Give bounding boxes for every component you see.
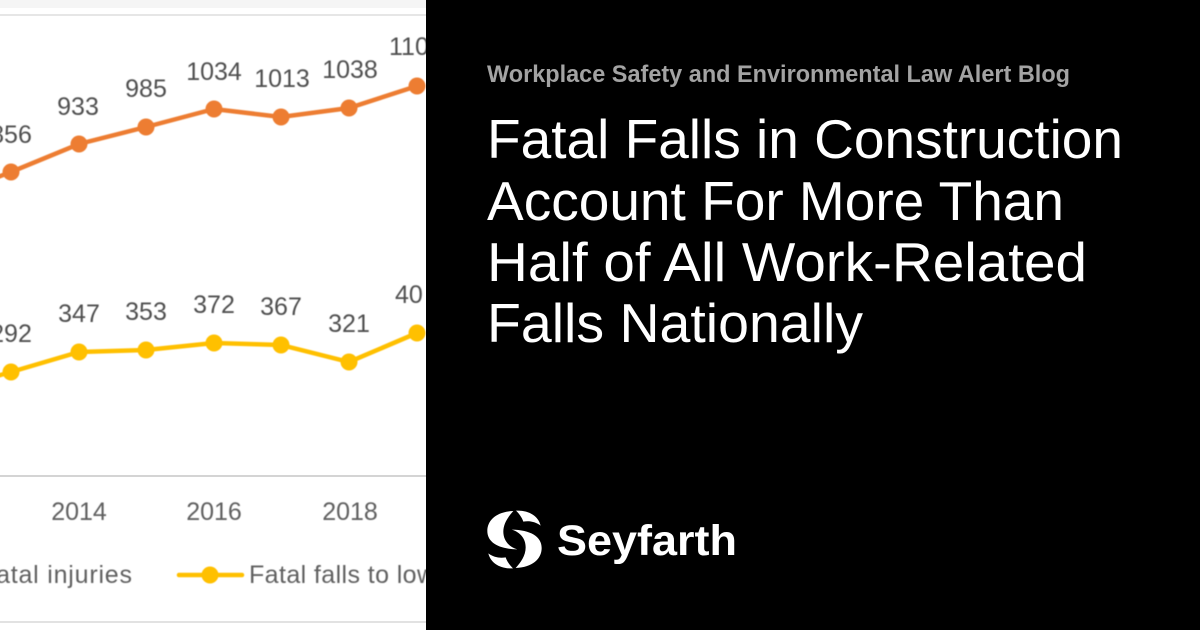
series: fatal falls to lower level (yellow): 367 — [260, 293, 302, 321]
x axis labels: 2016 — [186, 498, 242, 526]
x axis labels — [51, 498, 378, 526]
panel: black title panel — [426, 0, 1200, 630]
series: fatal falls to lower level (yellow): 372 — [193, 291, 235, 319]
legend: Fatal falls to lower level — [249, 561, 519, 589]
series: fatal falls to lower level (yellow): 353 — [125, 298, 167, 326]
logo: Seyfarth — [487, 511, 737, 568]
series: total falls (orange) — [0, 33, 429, 180]
series: fatal falls to lower level (yellow): 321 — [328, 310, 370, 338]
series: total falls (orange): 1034 — [186, 58, 242, 86]
wordmark: Seyfarth — [557, 517, 737, 565]
series: total falls (orange): 1013 — [254, 65, 310, 93]
series: fatal falls to lower level (yellow): 40 — [395, 281, 423, 309]
series: total falls (orange): 985 — [125, 75, 167, 103]
title: Account For More Than — [487, 170, 1064, 232]
series: total falls (orange): 1038 — [322, 56, 378, 84]
title: Falls Nationally — [487, 292, 863, 354]
blog name: Workplace Safety and Environmental Law Alert Blog — [487, 61, 1070, 88]
series: total falls (orange): 110 — [389, 33, 429, 61]
series: fatal falls to lower level (yellow) — [0, 281, 426, 380]
line chart — [0, 33, 519, 589]
series: fatal falls to lower level (yellow): 347 — [58, 300, 100, 328]
panel: chart image — [0, 0, 519, 630]
x axis labels: 2014 — [51, 498, 107, 526]
title: Half of All Work-Related — [487, 231, 1087, 293]
series: total falls (orange): 933 — [57, 93, 99, 121]
legend — [0, 561, 519, 589]
x axis labels: 2018 — [322, 498, 378, 526]
icon: Seyfarth S mark — [487, 511, 542, 568]
title: Fatal Falls in Construction — [487, 108, 1123, 170]
title — [487, 108, 1123, 354]
